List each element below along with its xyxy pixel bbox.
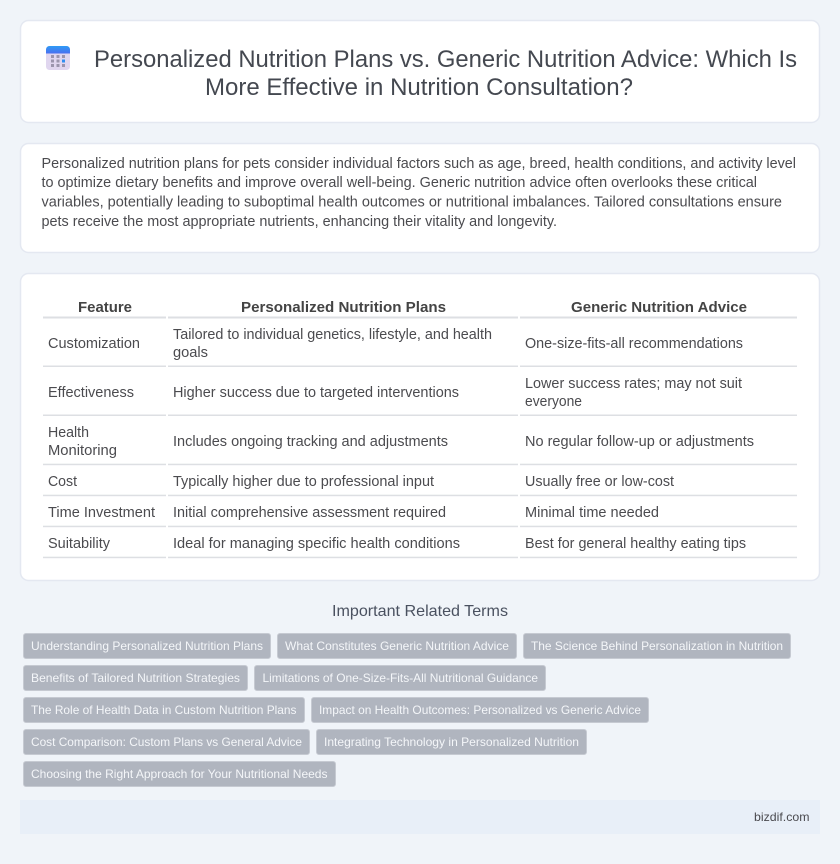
- row: cost: [48, 474, 674, 490]
- table header row: Feature: [78, 299, 132, 316]
- icon: calendar: [46, 46, 70, 70]
- row: health monitoring: Monitoring: [48, 443, 117, 459]
- row: time investment: [48, 505, 659, 521]
- tag: What Constitutes Generic Nutrition Advice: [285, 639, 509, 653]
- tag: [24, 666, 248, 690]
- title: More Effective in Nutrition Consultation?: [205, 74, 633, 101]
- row: health monitoring: No regular follow-up or adjustments: [525, 434, 754, 450]
- row: effectiveness: [48, 376, 742, 410]
- row: health monitoring: Includes ongoing tracking and adjustments: [173, 434, 448, 450]
- tag: [312, 698, 648, 722]
- row: time investment: Time Investment: [48, 505, 155, 521]
- tag: Benefits of Tailored Nutrition Strategies: [31, 671, 240, 685]
- tag: [524, 634, 790, 658]
- intro paragraph: to optimize dietary benefits and improve overall well-being. Generic nutrition advice often overlooks these critical: [42, 175, 757, 191]
- row: customization: One-size-fits-all recommendations: [525, 336, 743, 352]
- tag: Choosing the Right Approach for Your Nutritional Needs: [31, 767, 328, 781]
- tag: [24, 730, 310, 754]
- tag: Limitations of One-Size-Fits-All Nutritional Guidance: [262, 671, 538, 685]
- intro paragraph: variables, potentially leading to suboptimal health outcomes or nutritional imbalances. Tailored consultations ensure: [42, 194, 782, 210]
- table header row: Personalized Nutrition Plans: [241, 299, 446, 316]
- tag: Integrating Technology in Personalized Nutrition: [324, 735, 579, 749]
- footer bar: bizdif.com: [754, 810, 810, 824]
- row: health monitoring: Health: [48, 425, 89, 441]
- row: customization: [48, 327, 743, 361]
- tag: [278, 634, 516, 658]
- row: time investment: Initial comprehensive assessment required: [173, 505, 446, 521]
- row: customization: Customization: [48, 336, 140, 352]
- panel: introduction text: [20, 144, 820, 252]
- row: customization: goals: [173, 345, 208, 361]
- row: suitability: Best for general healthy eating tips: [525, 536, 746, 552]
- row: effectiveness: Lower success rates; may not suit: [525, 376, 742, 392]
- row: cost: Usually free or low-cost: [525, 474, 674, 490]
- row: effectiveness: Higher success due to targeted interventions: [173, 385, 459, 401]
- row: suitability: Ideal for managing specific health conditions: [173, 536, 460, 552]
- title: Personalized Nutrition Plans vs. Generic Nutrition Advice: Which Is: [94, 46, 797, 73]
- tag: Cost Comparison: Custom Plans vs General Advice: [31, 735, 302, 749]
- tag: [254, 666, 546, 690]
- row: suitability: Suitability: [48, 536, 111, 552]
- tag: Impact on Health Outcomes: Personalized vs Generic Advice: [319, 703, 641, 717]
- intro paragraph: [42, 156, 796, 230]
- row: time investment: Minimal time needed: [525, 505, 659, 521]
- intro paragraph: Personalized nutrition plans for pets consider individual factors such as age, breed, health conditions, and activity level: [42, 156, 796, 172]
- tag: [24, 762, 336, 786]
- panel: comparison table: [20, 274, 820, 580]
- panel: title header: [20, 20, 820, 122]
- title: [94, 46, 797, 101]
- row: suitability: [48, 536, 746, 552]
- tag: Understanding Personalized Nutrition Plans: [31, 639, 263, 653]
- tag: [316, 730, 586, 754]
- row: effectiveness: Effectiveness: [48, 385, 134, 401]
- related term tags: [24, 634, 790, 786]
- row: health monitoring: [48, 425, 754, 459]
- row: effectiveness: everyone: [525, 394, 582, 410]
- heading: important related terms: Important Related Terms: [332, 603, 508, 620]
- row: cost: Cost: [48, 474, 77, 490]
- row: cost: Typically higher due to professional input: [173, 474, 434, 490]
- table header row: Generic Nutrition Advice: [571, 299, 747, 316]
- tag: The Role of Health Data in Custom Nutrition Plans: [31, 703, 296, 717]
- intro paragraph: pets receive the most appropriate nutrients, enhancing their vitality and longevity.: [42, 214, 557, 230]
- table header row: [78, 299, 747, 316]
- row: customization: Tailored to individual genetics, lifestyle, and health: [173, 327, 492, 343]
- tag: [24, 634, 270, 658]
- tag: [24, 698, 304, 722]
- footer bar: [20, 800, 820, 834]
- tag: The Science Behind Personalization in Nutrition: [531, 639, 783, 653]
